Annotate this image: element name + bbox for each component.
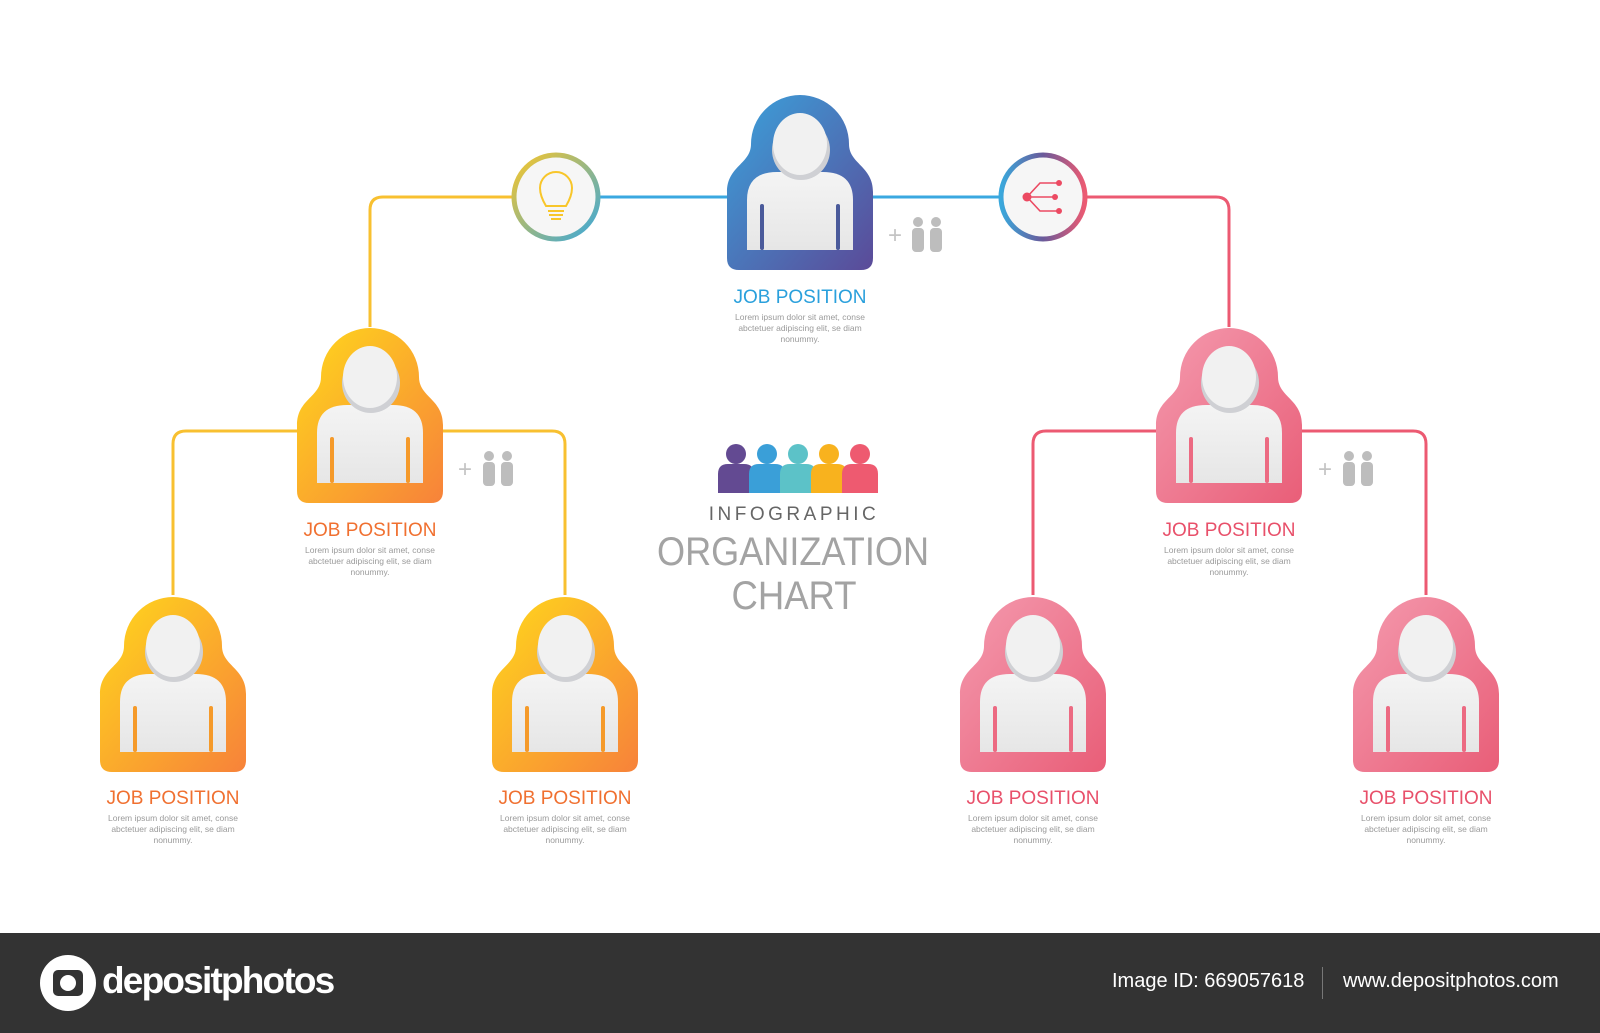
label: top: JOB POSITION xyxy=(733,287,867,308)
title block xyxy=(657,504,929,618)
footer url: www.depositphotos.com xyxy=(1343,970,1559,992)
label: bottom 3 xyxy=(966,788,1100,845)
title block: CHART xyxy=(732,574,856,618)
label: bottom 3: Lorem ipsum dolor sit amet, conse xyxy=(968,813,1098,823)
icon: add people (left): + xyxy=(458,456,472,483)
label: left middle: abctetuer adipiscing elit, se diam xyxy=(308,556,432,566)
connector lines xyxy=(173,197,1426,595)
footer logo xyxy=(40,955,334,1011)
label: bottom 2: Lorem ipsum dolor sit amet, conse xyxy=(500,813,630,823)
label: right middle xyxy=(1162,520,1296,577)
label: bottom 2 xyxy=(498,788,632,845)
footer logo: depositphotos xyxy=(102,960,333,1001)
label: bottom 2: nonummy. xyxy=(545,835,585,845)
label: bottom 4: Lorem ipsum dolor sit amet, conse xyxy=(1361,813,1491,823)
label: bottom 2: JOB POSITION xyxy=(498,788,632,809)
icon: add people (right): + xyxy=(1318,456,1332,483)
label: top: nonummy. xyxy=(780,334,820,344)
label: right middle: nonummy. xyxy=(1209,567,1249,577)
label: bottom 4: abctetuer adipiscing elit, se diam xyxy=(1364,824,1488,834)
label: right middle: abctetuer adipiscing elit, se diam xyxy=(1167,556,1291,566)
label: left middle xyxy=(303,520,437,577)
label: bottom 3: nonummy. xyxy=(1013,835,1053,845)
card: bottom 1 xyxy=(100,597,246,772)
icon: team of five people xyxy=(718,444,878,493)
label: bottom 1: Lorem ipsum dolor sit amet, conse xyxy=(108,813,238,823)
label: bottom 2: abctetuer adipiscing elit, se diam xyxy=(503,824,627,834)
card: top job position xyxy=(727,95,873,270)
label: top: abctetuer adipiscing elit, se diam xyxy=(738,323,862,333)
icon: add people (right) xyxy=(1318,451,1373,486)
label: bottom 1 xyxy=(106,788,240,845)
label: bottom 1: nonummy. xyxy=(153,835,193,845)
card: right middle xyxy=(1156,328,1302,503)
title block: INFOGRAPHIC xyxy=(709,504,879,525)
title block: ORGANIZATION xyxy=(657,530,929,574)
card: bottom 3 xyxy=(960,597,1106,772)
label: bottom 4: JOB POSITION xyxy=(1359,788,1493,809)
label: left middle: Lorem ipsum dolor sit amet, conse xyxy=(305,545,435,555)
label: top xyxy=(733,287,867,344)
label: bottom 1: abctetuer adipiscing elit, se diam xyxy=(111,824,235,834)
label: bottom 1: JOB POSITION xyxy=(106,788,240,809)
icon: add people (top): + xyxy=(888,222,902,249)
icon: add people (top) xyxy=(888,217,942,252)
label: bottom 4: nonummy. xyxy=(1406,835,1446,845)
card: bottom 2 xyxy=(492,597,638,772)
card: left middle xyxy=(297,328,443,503)
card: bottom 4 xyxy=(1353,597,1499,772)
label: right middle: Lorem ipsum dolor sit amet, conse xyxy=(1164,545,1294,555)
label: left middle: nonummy. xyxy=(350,567,390,577)
footer image id: Image ID: 669057618 xyxy=(1112,970,1304,992)
label: left middle: JOB POSITION xyxy=(303,520,437,541)
label: top: Lorem ipsum dolor sit amet, conse xyxy=(735,312,865,322)
footer bar xyxy=(0,933,1600,1033)
icon: add people (left) xyxy=(458,451,513,486)
label: bottom 3: JOB POSITION xyxy=(966,788,1100,809)
label: bottom 3: abctetuer adipiscing elit, se diam xyxy=(971,824,1095,834)
label: bottom 4 xyxy=(1359,788,1493,845)
icon: hierarchy circle xyxy=(1001,155,1085,239)
label: right middle: JOB POSITION xyxy=(1162,520,1296,541)
icon: lightbulb circle xyxy=(514,155,598,239)
